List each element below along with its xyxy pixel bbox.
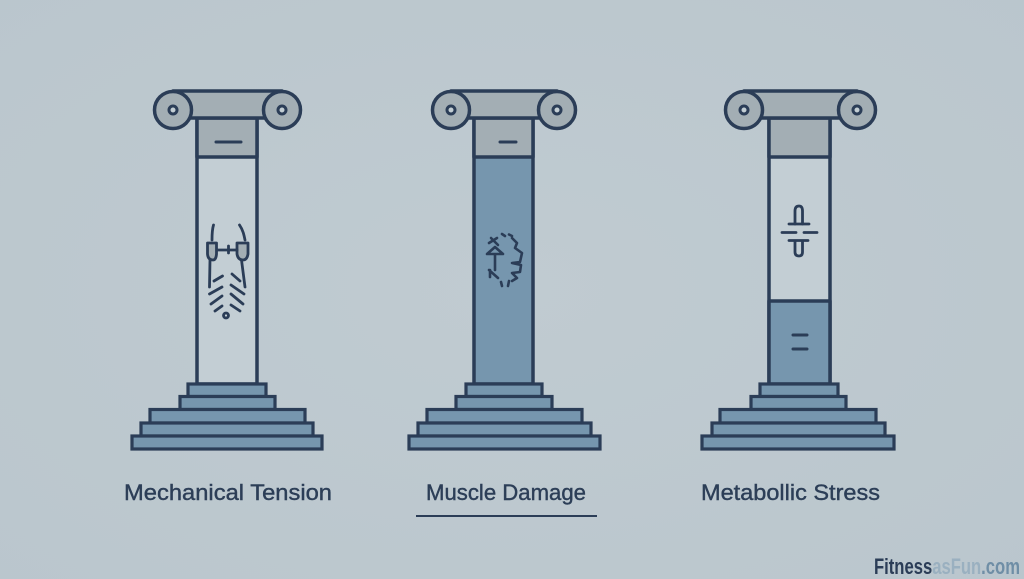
capital dash (216, 140, 241, 144)
lower fill level (769, 301, 830, 384)
label: metabolic stress: Metabollic Stress (701, 480, 880, 505)
shaft (197, 118, 257, 384)
underline: muscle damage (416, 515, 597, 517)
capital beam (173, 91, 282, 118)
capital beam (451, 91, 557, 118)
capital dash (500, 140, 516, 144)
icon: split tube (782, 206, 817, 256)
shaft filled (474, 118, 533, 384)
icon: torn muscle (487, 234, 522, 286)
left scroll (154, 92, 192, 128)
label: muscle damage: Muscle Damage (426, 480, 586, 505)
capital block (769, 118, 830, 157)
left scroll (432, 92, 470, 128)
shaft (769, 118, 830, 384)
pillar 1 stepped base (132, 384, 322, 449)
left scroll (726, 92, 762, 128)
capital beam (744, 91, 857, 118)
icon: muscle fibers (208, 225, 248, 318)
pillar 2 stepped base (409, 384, 600, 449)
capital block (474, 118, 533, 157)
capital block (197, 118, 257, 157)
pillar: mechanical tension (154, 91, 300, 384)
level dashes (793, 335, 807, 349)
pillar 3 stepped base (702, 384, 894, 449)
pillar: metabolic stress (726, 91, 876, 384)
label: mechanical tension: Mechanical Tension (124, 480, 332, 505)
pillar: muscle damage (432, 91, 576, 384)
right scroll (838, 92, 876, 128)
right scroll (264, 92, 300, 128)
right scroll (538, 92, 576, 128)
